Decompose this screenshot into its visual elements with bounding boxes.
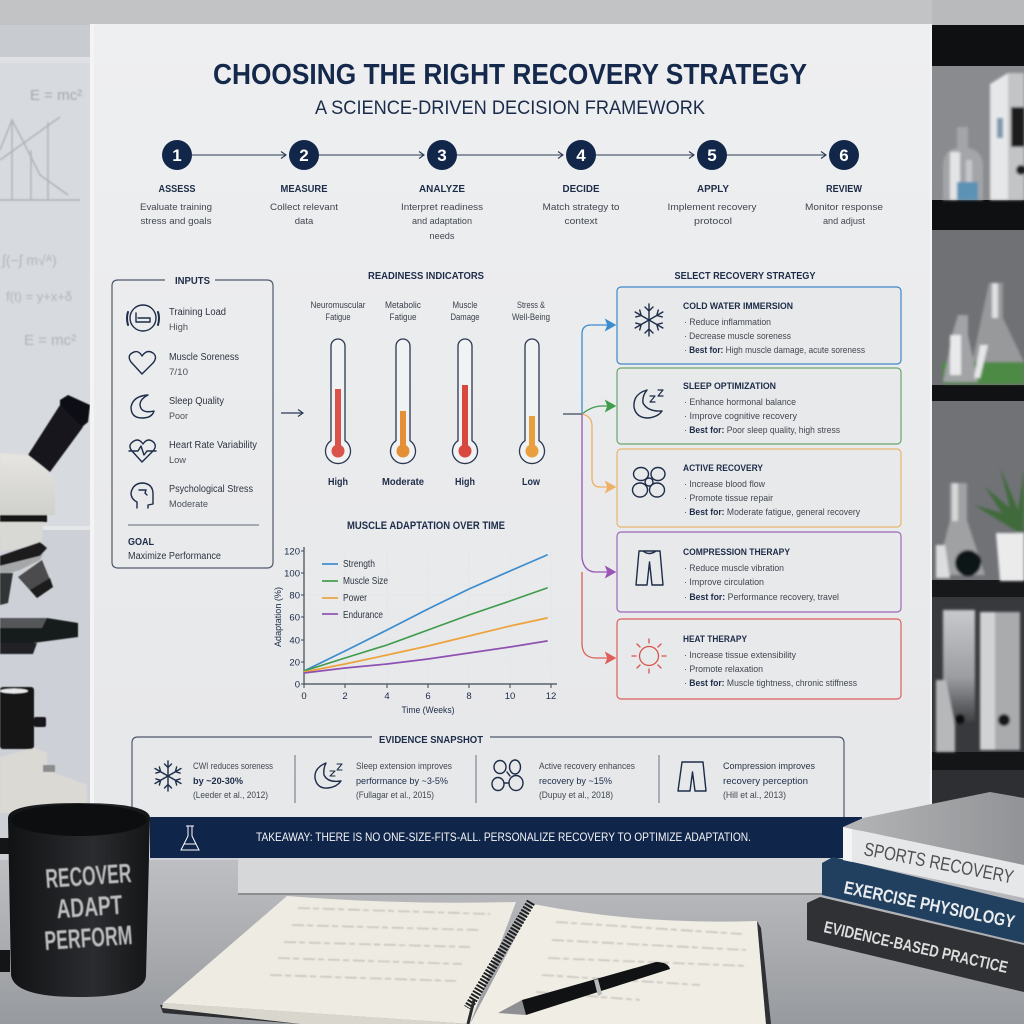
step 6: review: [805, 140, 883, 227]
step 6: review: REVIEW: [826, 184, 863, 195]
strategy heading: SELECT RECOVERY STRATEGY: [674, 271, 816, 282]
thermometer: metabolic fatigue: Moderate: [382, 477, 424, 488]
thermometer: neuromuscular fatigue: [310, 300, 366, 488]
panel: heat therapy: · Increase tissue extensibility: [684, 650, 796, 661]
input: sleep quality: Sleep Quality: [169, 396, 224, 407]
input: training load: [127, 305, 226, 333]
mug text: RECOVER: [44, 858, 132, 894]
evidence: cold water immersion: [153, 761, 273, 801]
inputs heading: INPUTS: [175, 276, 210, 287]
thermometer: metabolic fatigue: Fatigue: [390, 312, 416, 322]
chart: muscle adaptation over time: Adaptation (%): [273, 587, 284, 647]
y axis labels: 120: [284, 546, 300, 558]
panel: active recovery: ACTIVE RECOVERY: [683, 463, 764, 474]
evidence: compression: [678, 761, 815, 801]
step 3: analyze: [401, 140, 483, 242]
objectives: [18, 560, 53, 598]
whiteboard with formulas: f(t) = y+x+δ: [6, 289, 72, 304]
step 5: apply: [668, 140, 757, 227]
thermometer: metabolic fatigue: [382, 300, 424, 488]
x axis labels: 6: [425, 691, 431, 702]
chart legend: Muscle Size: [343, 576, 388, 587]
stage: [0, 618, 78, 643]
process flow: six steps: [140, 140, 883, 242]
panel: cold water immersion: COLD WATER IMMERSION: [683, 301, 793, 312]
evidence: active recovery: (Dupuy et al., 2018): [539, 790, 613, 801]
x axis labels: 2: [342, 691, 348, 702]
thermometer: stress and well-being: [512, 300, 550, 488]
panel: sleep optimization: · Best for: Poor sleep quality, high stress: [684, 425, 840, 436]
thermometer: metabolic fatigue: Metabolic: [385, 300, 421, 310]
icon: four-lobe recovery symbol: [632, 468, 665, 497]
evidence: active recovery: [492, 760, 635, 801]
goal: [128, 537, 221, 562]
step 3: analyze: and adaptation: [412, 216, 472, 227]
input: heart rate variability: Low: [169, 455, 186, 466]
panel: heat therapy: HEAT THERAPY: [683, 634, 748, 645]
icon: sun: [632, 639, 666, 673]
thermometer: neuromuscular fatigue: High: [328, 477, 348, 488]
icon: moon with zzz: [634, 390, 663, 418]
poster board: [90, 24, 932, 858]
evidence: cold water immersion: CWI reduces soreness: [193, 761, 273, 772]
step 6: review: 6: [839, 146, 849, 165]
input: sleep quality: Poor: [169, 411, 188, 422]
evidence: sleep extension: Sleep extension improves: [356, 761, 452, 772]
chart legend: Endurance: [343, 610, 383, 621]
thermometer: neuromuscular fatigue: Neuromuscular: [310, 300, 366, 310]
panel: compression therapy: · Improve circulation: [684, 577, 764, 588]
thermometer: muscle damage: Muscle: [452, 300, 478, 310]
axis titles: Time (Weeks): [402, 705, 454, 716]
green flasks: [972, 283, 1024, 382]
x axis labels: 10: [505, 691, 515, 702]
input: sleep quality: [131, 395, 224, 422]
plant: [974, 467, 1024, 581]
readiness heading: READINESS INDICATORS: [368, 271, 484, 282]
chart legend: Strength: [343, 559, 375, 570]
step 5: apply: APPLY: [697, 184, 729, 195]
whiteboard with formulas: E = mc²: [24, 332, 76, 349]
book: evidence-based practice: [807, 897, 1024, 992]
evidence: cold water immersion: (Leeder et al., 2012): [193, 790, 268, 801]
x axis labels: 8: [466, 691, 472, 702]
panel: compression therapy: · Best for: Performance recovery, travel: [684, 592, 839, 603]
panel: compression therapy: · Reduce muscle vibration: [684, 563, 784, 574]
evidence heading: EVIDENCE SNAPSHOT: [379, 735, 483, 746]
panel: compression therapy: [617, 532, 901, 612]
panel: heat therapy: [617, 619, 901, 699]
icon: snowflake: [633, 304, 665, 336]
shelving unit: [932, 0, 1024, 840]
lamp: [0, 687, 34, 749]
thermometer: muscle damage: High: [455, 477, 475, 488]
evidence: compression: recovery perception: [723, 776, 808, 787]
evidence: active recovery: recovery by ~15%: [539, 776, 613, 787]
panel: inputs: [112, 276, 273, 568]
chart legend: Power: [343, 593, 368, 604]
panel: cold water immersion: [617, 287, 901, 364]
y axis labels: 60: [289, 612, 300, 624]
panel: active recovery: [617, 449, 901, 527]
book: sports recovery: [843, 792, 1024, 898]
panel: sleep optimization: · Improve cognitive recovery: [684, 411, 797, 422]
notebook: [160, 896, 771, 1024]
black liquid flask: [936, 483, 985, 575]
handwritten notes: [270, 908, 748, 1000]
panel: cold water immersion: · Reduce inflammation: [684, 317, 771, 328]
whiteboard with formulas: ∫(−∫ m√ᴬ): [1, 252, 57, 268]
thermometer: neuromuscular fatigue: Fatigue: [326, 312, 350, 322]
step 2: measure: MEASURE: [280, 184, 328, 195]
evidence: compression: Compression improves: [723, 761, 815, 772]
panel: active recovery: · Promote tissue repair: [684, 493, 773, 504]
mug text: [43, 858, 133, 956]
thermometer: stress and well-being: Stress &: [517, 300, 545, 310]
evidence: compression: (Hill et al., 2013): [723, 790, 786, 801]
step 1: assess: [140, 140, 212, 227]
step 3: analyze: ANALYZE: [419, 184, 465, 195]
step 4: decide: 4: [576, 146, 586, 165]
whiteboard with formulas: E = mc²: [30, 87, 82, 104]
arrow: inputs to readiness: [281, 410, 303, 416]
eyepiece: [28, 405, 83, 472]
panel: sleep optimization: · Enhance hormonal balance: [684, 397, 796, 408]
input: muscle soreness: Muscle Soreness: [169, 352, 239, 363]
input: psychological stress: [131, 483, 253, 510]
input: psychological stress: Psychological Stress: [169, 484, 253, 495]
step 5: apply: 5: [707, 146, 717, 165]
panel: sleep optimization: SLEEP OPTIMIZATION: [683, 381, 776, 392]
microscope: [0, 395, 90, 813]
input: psychological stress: Moderate: [169, 499, 208, 510]
nosepiece: [0, 542, 47, 566]
step 5: apply: Implement recovery: [668, 202, 757, 213]
spiral binding: [468, 902, 531, 1008]
x axis labels: 0: [301, 691, 307, 702]
thermometer: muscle damage: [450, 300, 480, 488]
input: training load: High: [169, 322, 188, 333]
input: muscle soreness: 7/10: [169, 367, 188, 378]
panel: heat therapy: · Promote relaxation: [684, 664, 763, 675]
shelf objects: bottles, flasks, plant, binders: [936, 73, 1024, 752]
step 1: assess: stress and goals: [140, 216, 212, 227]
icon: compression shorts: [636, 551, 663, 585]
step 4: decide: [542, 140, 620, 227]
evidence: cold water immersion: by ~20-30%: [193, 776, 244, 787]
y axis labels: 40: [289, 636, 300, 646]
book stack: [807, 792, 1024, 992]
step 1: assess: ASSESS: [158, 184, 196, 195]
panel: evidence snapshot: [132, 735, 844, 817]
evidence: active recovery: Active recovery enhances: [539, 761, 635, 772]
y axis labels: 80: [289, 590, 300, 602]
step 4: decide: Match strategy to: [542, 202, 620, 213]
x axis labels: 4: [384, 691, 390, 702]
step 1: assess: Evaluate training: [140, 202, 212, 213]
step 6: review: and adjust: [823, 216, 865, 227]
step 3: analyze: Interpret readiness: [401, 202, 483, 213]
pen: [498, 962, 670, 1015]
input: heart rate variability: Heart Rate Variability: [169, 440, 257, 451]
step 4: decide: DECIDE: [562, 184, 600, 195]
panel: compression therapy: COMPRESSION THERAPY: [683, 547, 791, 558]
x axis labels: 12: [546, 691, 556, 702]
goal: Maximize Performance: [128, 551, 221, 562]
desk surface: [0, 858, 1024, 1024]
step 3: analyze: 3: [437, 146, 447, 165]
x axis labels: [301, 691, 556, 702]
thermometer: stress and well-being: Low: [522, 477, 540, 488]
panel: sleep optimization: [617, 368, 901, 444]
subtitle: A SCIENCE-DRIVEN DECISION FRAMEWORK: [315, 97, 705, 119]
series lines: [304, 555, 547, 673]
chart: muscle adaptation over time: [273, 520, 557, 716]
readiness indicators: [310, 271, 550, 488]
base: [0, 748, 87, 813]
glass bottle: [943, 127, 983, 200]
arrows between steps: [192, 152, 826, 158]
evidence: sleep extension: [315, 761, 452, 801]
y axis labels: 20: [289, 658, 300, 668]
input: muscle soreness: [129, 352, 239, 378]
panel: cold water immersion: · Best for: High muscle damage, acute soreness: [684, 345, 865, 356]
panel: active recovery: · Best for: Moderate fatigue, general recovery: [684, 507, 860, 518]
takeaway banner: TAKEAWAY: THERE IS NO ONE-SIZE-FITS-ALL. PERSONALIZE RECOVERY TO OPTIMIZE ADAPTATION.: [256, 830, 751, 844]
step 2: measure: [270, 140, 338, 227]
y axis labels: 0: [295, 680, 300, 690]
mug text: ADAPT: [55, 890, 124, 924]
book: exercise physiology: [822, 857, 1024, 943]
step 3: analyze: needs: [430, 231, 455, 242]
evidence: sleep extension: (Fullagar et al., 2015): [356, 790, 434, 801]
step 2: measure: data: [295, 216, 314, 227]
binders: [943, 610, 975, 722]
input: training load: Training Load: [169, 307, 226, 318]
step 2: measure: Collect relevant: [270, 202, 338, 213]
thermometer: stress and well-being: Well-Being: [512, 312, 550, 322]
goal: GOAL: [128, 537, 154, 548]
step 2: measure: 2: [299, 146, 309, 165]
step 6: review: Monitor response: [805, 202, 883, 213]
icon: flask: [181, 826, 199, 850]
panel: active recovery: · Increase blood flow: [684, 479, 765, 490]
panel: heat therapy: · Best for: Muscle tightness, chronic stiffness: [684, 678, 857, 689]
input: heart rate variability: [129, 440, 257, 466]
takeaway banner: [150, 817, 862, 858]
white box: [990, 73, 1008, 200]
y axis labels: 100: [284, 568, 300, 580]
y axis labels: [284, 546, 300, 690]
mug: [0, 803, 150, 997]
whiteboard with formulas: [0, 25, 95, 530]
step 4: decide: context: [564, 216, 598, 227]
panel: cold water immersion: · Decrease muscle soreness: [684, 331, 791, 342]
step 5: apply: protocol: [694, 216, 732, 227]
mug text: PERFORM: [43, 920, 133, 956]
chart heading: MUSCLE ADAPTATION OVER TIME: [347, 520, 505, 532]
step 1: assess: 1: [172, 146, 182, 165]
head: [0, 453, 55, 517]
strategy selection connectors: [563, 320, 615, 663]
title: CHOOSING THE RIGHT RECOVERY STRATEGY: [213, 59, 807, 91]
chart legend: [322, 559, 388, 621]
thermometer: muscle damage: Damage: [450, 312, 480, 322]
evidence: sleep extension: performance by ~3-5%: [356, 776, 449, 787]
